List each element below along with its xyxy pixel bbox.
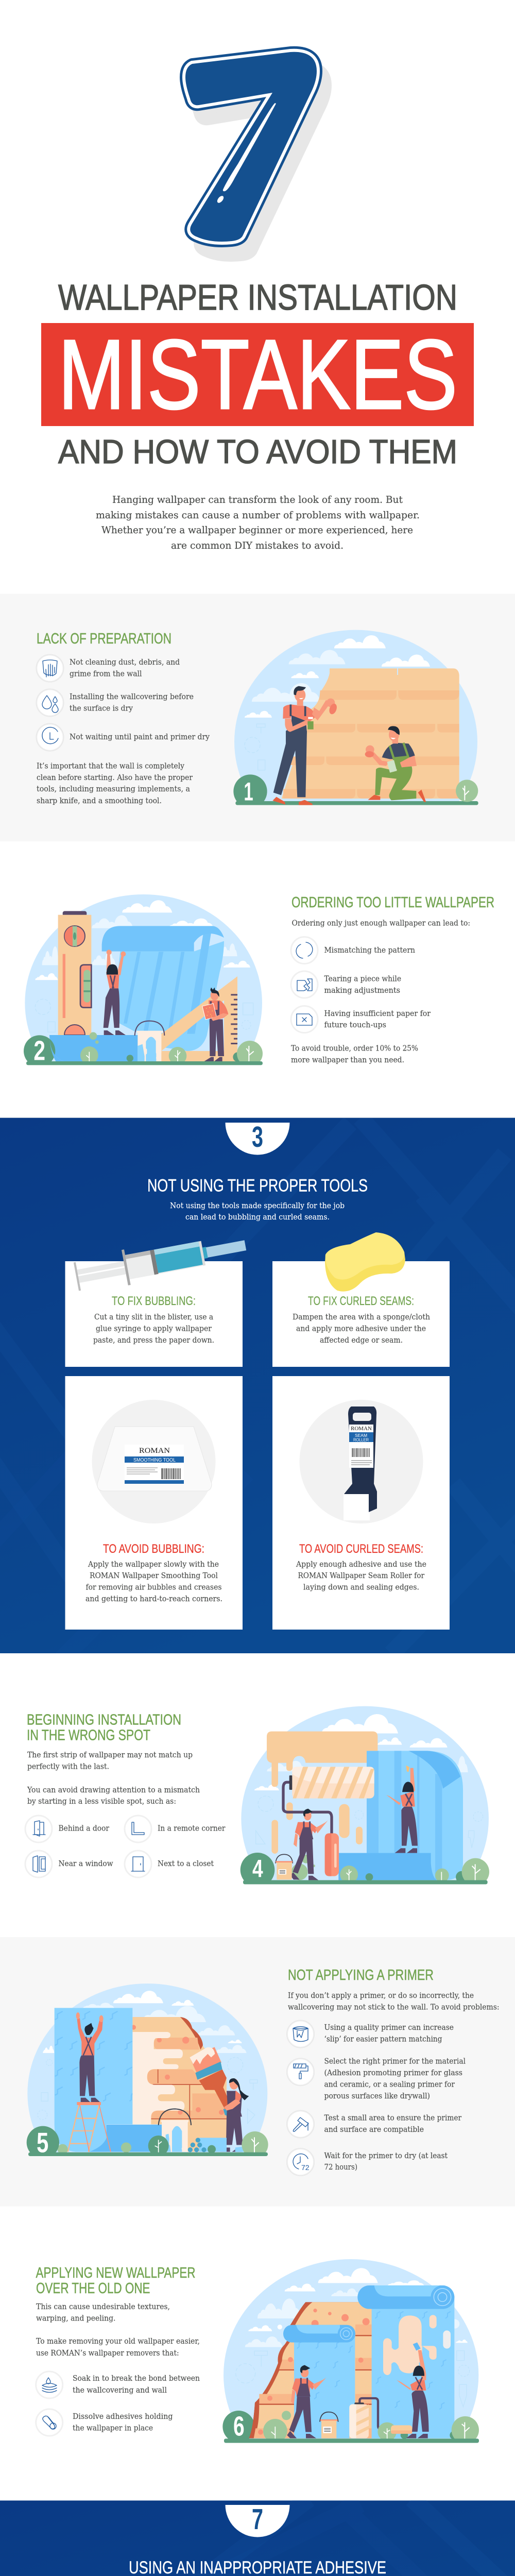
heading: IN THE WRONG SPOT xyxy=(27,1727,150,1744)
intro text: making mistakes can cause a number of problems with wallpaper. xyxy=(96,510,420,521)
text: quality primer xyxy=(324,2023,454,2043)
illustration: level, wallpaper roll and workers xyxy=(24,894,263,1065)
text: right primer: (Adhesion promoting primer for glass xyxy=(324,2068,462,2077)
header: numeral, title and intro xyxy=(41,46,474,551)
card text: and apply more adhesive under the xyxy=(296,1324,426,1333)
icon: brush xyxy=(287,2111,314,2138)
product: seam roller: ROMAN xyxy=(351,1426,372,1432)
lead text: If you don’t apply a primer, or do so incorrectly, the xyxy=(288,1991,474,2000)
icon: dissolve xyxy=(36,2409,63,2436)
card title: TO FIX CURLED SEAMS: xyxy=(308,1294,414,1308)
illustration: paint roller and wallpaper xyxy=(240,1706,489,1885)
number tab 3 xyxy=(226,1121,289,1155)
text: insufficient paper: Having insufficient paper for xyxy=(324,1009,431,1018)
text block: To make removing your old wallpaper easier, xyxy=(36,2336,200,2346)
icon: paint roller xyxy=(287,2059,314,2086)
panel: mistake 5 not applying a primer xyxy=(27,1967,500,2176)
text block: You can avoid drawing attention to a mismatch xyxy=(27,1785,200,1794)
badge 4: 4 xyxy=(252,1855,263,1883)
icon: pattern arrows xyxy=(291,937,318,963)
subheading xyxy=(170,1201,345,1222)
badge 2: 2 xyxy=(33,1036,45,1066)
heading: OVER THE OLD ONE xyxy=(36,2280,150,2297)
icon: torn paper xyxy=(291,971,318,998)
icon: window xyxy=(25,1851,52,1877)
text: wait: 72 hours) xyxy=(324,2162,357,2172)
text: dissolve xyxy=(73,2412,173,2433)
icon: water drops xyxy=(37,689,63,716)
text: tearing: making adjustments xyxy=(324,986,400,995)
product: smoothing tool: ROMAN xyxy=(139,1447,170,1455)
intro text: Whether you’re a wallpaper beginner or more experienced, here xyxy=(101,524,413,536)
section: mistake 2 ordering too little wallpaper xyxy=(24,894,494,1066)
card: to avoid curled seams xyxy=(272,1376,450,1630)
text: not waiting: Not waiting until paint and primer dry xyxy=(70,732,210,741)
text: not cleaning: grime from the wall xyxy=(70,669,142,678)
card text: glue syringe to apply wallpaper xyxy=(96,1324,212,1333)
paragraph xyxy=(37,761,193,805)
paragraph: sharp knife, and a smoothing tool. xyxy=(37,796,162,805)
text block: by starting in a less visible spot, such as: xyxy=(27,1797,176,1806)
lead text: wallcovering may not stick to the wall. To avoid problems: xyxy=(288,2003,500,2012)
number tab 3: 3 xyxy=(252,1121,263,1154)
icon: clock xyxy=(37,724,63,751)
panel: mistake 7 using an inappropriate adhesive xyxy=(0,2500,515,2576)
card text xyxy=(93,1312,214,1345)
text block: use ROMAN’s wallpaper removers that: xyxy=(36,2348,179,2358)
heading xyxy=(36,2265,196,2297)
intro text: are common DIY mistakes to avoid. xyxy=(171,540,344,551)
text: tearing: Tearing a piece while xyxy=(324,974,401,983)
text: right primer: and ceramic, or a sealing primer for xyxy=(324,2079,455,2089)
text: right primer: porous surfaces like drywall) xyxy=(324,2091,430,2100)
text: soak in: the wallcovering and wall xyxy=(73,2385,167,2395)
icon: 72 hour clock xyxy=(287,2148,314,2175)
text: not cleaning xyxy=(70,657,180,678)
card text: laying down and sealing edges. xyxy=(303,1583,419,1592)
icon: cloth and hand xyxy=(37,655,63,682)
heading: APPLYING NEW WALLPAPER xyxy=(36,2265,196,2281)
text: quality primer: ‘slip’ for easier pattern matching xyxy=(324,2034,442,2043)
badge 5: 5 xyxy=(37,2126,48,2158)
paragraph: tools, including measuring implements, a xyxy=(37,784,190,793)
icon: paper with x xyxy=(291,1006,318,1032)
card title: TO AVOID CURLED SEAMS: xyxy=(299,1542,423,1556)
text: insufficient paper xyxy=(324,1009,431,1029)
text: installing: Installing the wallcovering before xyxy=(70,692,194,701)
lead text xyxy=(288,1991,500,2012)
text block: perfectly with the last. xyxy=(27,1762,109,1771)
text: mismatching: Mismatching the pattern xyxy=(324,945,415,955)
paragraph: It’s important that the wall is completely xyxy=(37,761,184,771)
badge 4 xyxy=(240,1853,275,1880)
icon: door xyxy=(25,1816,52,1842)
badge 2 xyxy=(24,1035,63,1061)
text: right primer: Select the right primer for the material xyxy=(324,2057,466,2066)
illustration: two workers cleaning a wall xyxy=(233,630,478,805)
card text xyxy=(293,1312,430,1345)
title xyxy=(41,277,474,470)
card: to avoid bubbling xyxy=(65,1376,243,1630)
text: insufficient paper: future touch-ups xyxy=(324,1020,386,1029)
text: behind a door: Behind a door xyxy=(59,1824,110,1833)
illustration: hanging new wallpaper over old xyxy=(222,2259,479,2443)
text: wait xyxy=(324,2151,448,2172)
subheading: can lead to bubbling and curled seams. xyxy=(185,1212,330,1222)
subheading: Not using the tools made specifically for the job xyxy=(170,1201,345,1210)
text: installing xyxy=(70,692,194,713)
section: mistake 6 applying new wallpaper over the old one xyxy=(35,2259,479,2443)
product: seam roller xyxy=(344,1406,377,1520)
card text: Apply the wallpaper slowly with the xyxy=(88,1560,219,1569)
intro text xyxy=(96,494,420,551)
icon: corner xyxy=(125,1816,151,1842)
text: wait: Wait for the primer to dry (at least xyxy=(324,2151,448,2160)
product: seam roller: ROLLER xyxy=(353,1437,369,1443)
text: dissolve: the wallpaper in place xyxy=(73,2424,153,2433)
heading: NOT APPLYING A PRIMER xyxy=(288,1967,434,1984)
paragraph: clean before starting. Also have the proper xyxy=(37,773,193,782)
icon: paint can xyxy=(287,2021,314,2047)
card text: Cut a tiny slit in the blister, use a xyxy=(94,1312,213,1321)
product: smoothing tool xyxy=(97,1427,212,1491)
panel: mistake 1 lack of preparation xyxy=(36,630,478,806)
text: test area: Test a small area to ensure the primer xyxy=(324,2113,462,2122)
heading: BEGINNING INSTALLATION xyxy=(27,1712,181,1728)
text: test area xyxy=(324,2113,462,2134)
text block xyxy=(27,1750,200,1806)
text: right primer xyxy=(324,2057,466,2100)
text: installing: the surface is dry xyxy=(70,704,133,713)
number tab 7: 7 xyxy=(252,2503,263,2536)
text: soak in xyxy=(73,2374,200,2395)
text: avoid trouble: To avoid trouble, order 10% to 25% xyxy=(291,1044,418,1053)
illustration: ladder and primer brush xyxy=(27,1984,268,2156)
text: quality primer: Using a quality primer can increase xyxy=(324,2023,454,2032)
text: soak in: Soak in to break the bond between xyxy=(73,2374,200,2383)
text block xyxy=(36,2302,200,2358)
section: mistake 4 beginning installation in the wrong spot xyxy=(25,1706,489,1885)
card title: TO FIX BUBBLING: xyxy=(112,1294,196,1308)
text block: warping, and peeling. xyxy=(36,2313,115,2323)
text: next to a closet: Next to a closet xyxy=(158,1859,214,1868)
icon: 72 hour clock: 72 xyxy=(301,2163,310,2172)
text: avoid trouble xyxy=(291,1044,418,1064)
lead text: Ordering only just enough wallpaper can lead to: xyxy=(291,919,470,928)
heading xyxy=(27,1712,181,1744)
panel: mistake 3 not using the proper tools xyxy=(0,1117,515,1653)
text: avoid trouble: more wallpaper than you need. xyxy=(291,1055,404,1064)
heading: NOT USING THE PROPER TOOLS xyxy=(147,1176,368,1195)
card text xyxy=(296,1560,426,1592)
text: test area: and surface are compatible xyxy=(324,2125,424,2134)
card text: ROMAN Wallpaper Smoothing Tool xyxy=(90,1571,218,1580)
card text: for removing air bubbles and creases xyxy=(85,1583,221,1592)
card text: Apply enough adhesive and use the xyxy=(296,1560,426,1569)
card text: Dampen the area with a sponge/cloth xyxy=(293,1312,430,1321)
text: not cleaning: Not cleaning dust, debris, and xyxy=(70,657,180,667)
card title: TO AVOID BUBBLING: xyxy=(103,1542,204,1556)
badge 6: 6 xyxy=(233,2411,245,2442)
heading: LACK OF PREPARATION xyxy=(37,631,171,647)
text: near a window: Near a window xyxy=(59,1859,113,1868)
badge 5 xyxy=(27,2126,59,2153)
text: tearing xyxy=(324,974,401,995)
card text: and getting to hard-to-reach corners. xyxy=(85,1594,222,1603)
text: dissolve: Dissolve adhesives holding xyxy=(73,2412,173,2421)
icon: closet xyxy=(125,1851,151,1877)
card text: ROMAN Wallpaper Seam Roller for xyxy=(298,1571,425,1580)
icon: sponge xyxy=(325,1232,405,1292)
badge 1 xyxy=(233,774,267,802)
card text: affected edge or seam. xyxy=(320,1335,403,1345)
icon: soak xyxy=(36,2371,63,2398)
number tab 7 xyxy=(226,2503,289,2537)
text block: This can cause undesirable textures, xyxy=(36,2302,170,2311)
text block: The first strip of wallpaper may not match up xyxy=(27,1750,193,1759)
product: smoothing tool: SMOOTHING TOOL xyxy=(133,1458,176,1463)
intro text: Hanging wallpaper can transform the look of any room. But xyxy=(112,494,403,505)
text: remote corner: In a remote corner xyxy=(158,1824,226,1833)
title: AND HOW TO AVOID THEM xyxy=(58,433,457,470)
icon: syringe xyxy=(73,1228,249,1294)
card: to fix curled seams xyxy=(272,1232,450,1367)
badge 1: 1 xyxy=(244,777,253,806)
card text: paste, and press the paper down. xyxy=(93,1335,214,1345)
badge 6 xyxy=(222,2403,255,2439)
card text xyxy=(85,1560,222,1603)
big numeral 7 graphic xyxy=(185,52,326,256)
card: to fix bubbling xyxy=(65,1228,249,1367)
product: seam roller: SEAM xyxy=(355,1433,367,1438)
